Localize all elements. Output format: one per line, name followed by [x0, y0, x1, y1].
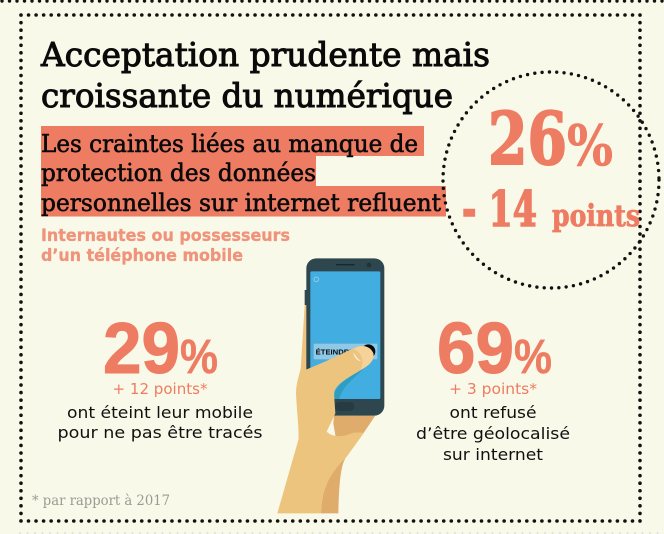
stat: 29% mobile off: ont éteint leur mobile	[67, 403, 253, 422]
stat: minus 14 points	[462, 180, 640, 238]
switch button: ÉTEINDRE	[316, 347, 354, 356]
dotted circle	[443, 72, 659, 288]
stat: 69% geolocation refused: ont refusé	[450, 403, 536, 422]
stat: 26%: %	[567, 113, 613, 179]
stat: 29% mobile off: pour ne pas être tracés	[58, 423, 262, 442]
subtitle highlight: personnelles sur internet refluent	[41, 188, 441, 217]
title: croissante du numérique	[41, 76, 453, 115]
stat: 26%: 26	[488, 96, 567, 181]
population label: Internautes ou possesseurs	[41, 226, 290, 245]
subtitle highlight: protection des données	[41, 158, 316, 187]
subtitle highlight: Les craintes liées au manque de	[41, 129, 418, 158]
stat: minus 14 points: points	[552, 199, 640, 234]
hand	[277, 346, 374, 513]
stat: 29% mobile off	[58, 309, 262, 442]
stat: 69% geolocation refused: sur internet	[443, 445, 543, 464]
population label: d’un téléphone mobile	[41, 246, 243, 265]
switch button	[314, 344, 377, 359]
stat: 69% geolocation refused: d’être géolocalisé	[416, 424, 570, 443]
footnote: * par rapport à 2017	[32, 492, 170, 509]
stat: 29% mobile off: 29	[103, 309, 180, 389]
title	[40, 35, 490, 115]
stat: 69% geolocation refused: + 3 points*	[449, 380, 538, 398]
stat: 69% geolocation refused	[416, 309, 570, 464]
stat: 29% mobile off: %	[180, 331, 218, 384]
population label	[41, 226, 290, 265]
stat: 29% mobile off: + 12 points*	[112, 380, 208, 398]
title: Acceptation prudente mais	[40, 35, 490, 74]
stat: 69% geolocation refused: 69	[437, 309, 514, 389]
subtitle highlight	[41, 126, 446, 217]
stat: 69% geolocation refused: %	[514, 331, 552, 384]
phone	[306, 258, 384, 416]
illustration: hand holding phone	[277, 258, 384, 513]
stat: minus 14 points: - 14	[462, 180, 537, 238]
